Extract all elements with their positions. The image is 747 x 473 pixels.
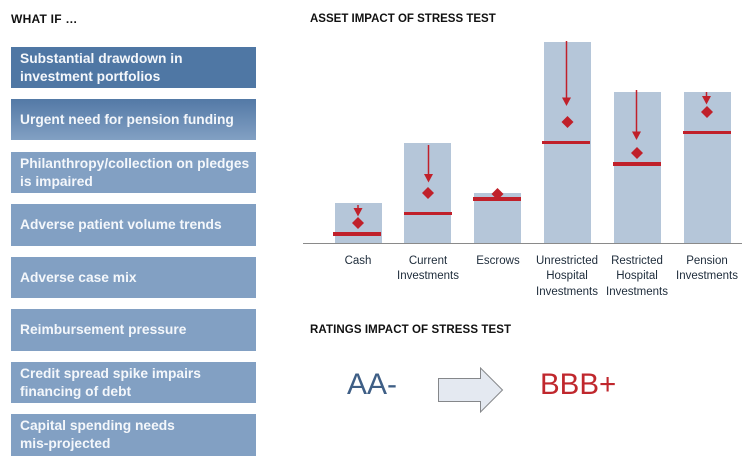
heading: what if: WHAT IF … [11, 12, 78, 26]
scenario: philanthropy: Philanthropy/collection on pledges [20, 156, 249, 171]
panel: what-if scenarios [11, 47, 256, 456]
scenario: pension funding: Urgent need for pension funding [20, 112, 234, 126]
scenario: patient volume: Adverse patient volume trends [20, 217, 222, 232]
axis labels: Hospital [546, 270, 588, 282]
bar group: pension investments [683, 92, 731, 243]
scenario: philanthropy [11, 152, 256, 193]
axis labels: Current [409, 255, 448, 267]
scenario: capital spending: Capital spending needs [20, 418, 175, 433]
scenario: drawdown: investment portfolios [20, 69, 160, 84]
axis labels: Investments [606, 286, 668, 298]
scenario: credit spread [11, 362, 256, 403]
axis labels: Investments [676, 270, 738, 282]
axis labels: Pension [686, 255, 728, 267]
scenario: reimbursement: Reimbursement pressure [20, 322, 186, 337]
scenario: capital spending: mis-projected [20, 436, 110, 451]
scenario: patient volume [11, 204, 256, 246]
bar group: restricted hospital investments [613, 90, 661, 243]
heading: asset impact: ASSET IMPACT OF STRESS TEST [310, 13, 496, 25]
bar group: unrestricted hospital investments [542, 41, 591, 243]
scenario: case mix: Adverse case mix [20, 270, 137, 284]
rating: after: BBB+ [540, 368, 616, 401]
axis labels: Investments [397, 270, 459, 282]
scenario: drawdown [11, 47, 256, 88]
bar group: current investments [404, 143, 452, 243]
rating: before: AA- [347, 368, 397, 401]
axis labels: Escrows [476, 255, 520, 267]
axis labels: Hospital [616, 270, 658, 282]
arrow: rating change [438, 367, 504, 413]
axis labels: Unrestricted [536, 255, 598, 267]
scenario: capital spending [11, 414, 256, 456]
heading: ratings impact: RATINGS IMPACT OF STRESS TEST [310, 324, 511, 336]
scenario: drawdown: Substantial drawdown in [20, 51, 183, 66]
scenario: credit spread: Credit spread spike impairs [20, 366, 201, 381]
axis labels: Investments [536, 286, 598, 298]
axis labels [345, 255, 738, 298]
scenario: pension funding [11, 99, 256, 140]
axis labels: Restricted [611, 255, 663, 267]
bar group: cash [333, 203, 382, 243]
scenario: reimbursement [11, 309, 256, 351]
scenario: philanthropy: is impaired [20, 174, 93, 189]
scenario: credit spread: financing of debt [20, 384, 131, 399]
bar group: escrows [473, 188, 521, 243]
scenario: case mix [11, 257, 256, 298]
axis labels: Cash [345, 255, 371, 267]
